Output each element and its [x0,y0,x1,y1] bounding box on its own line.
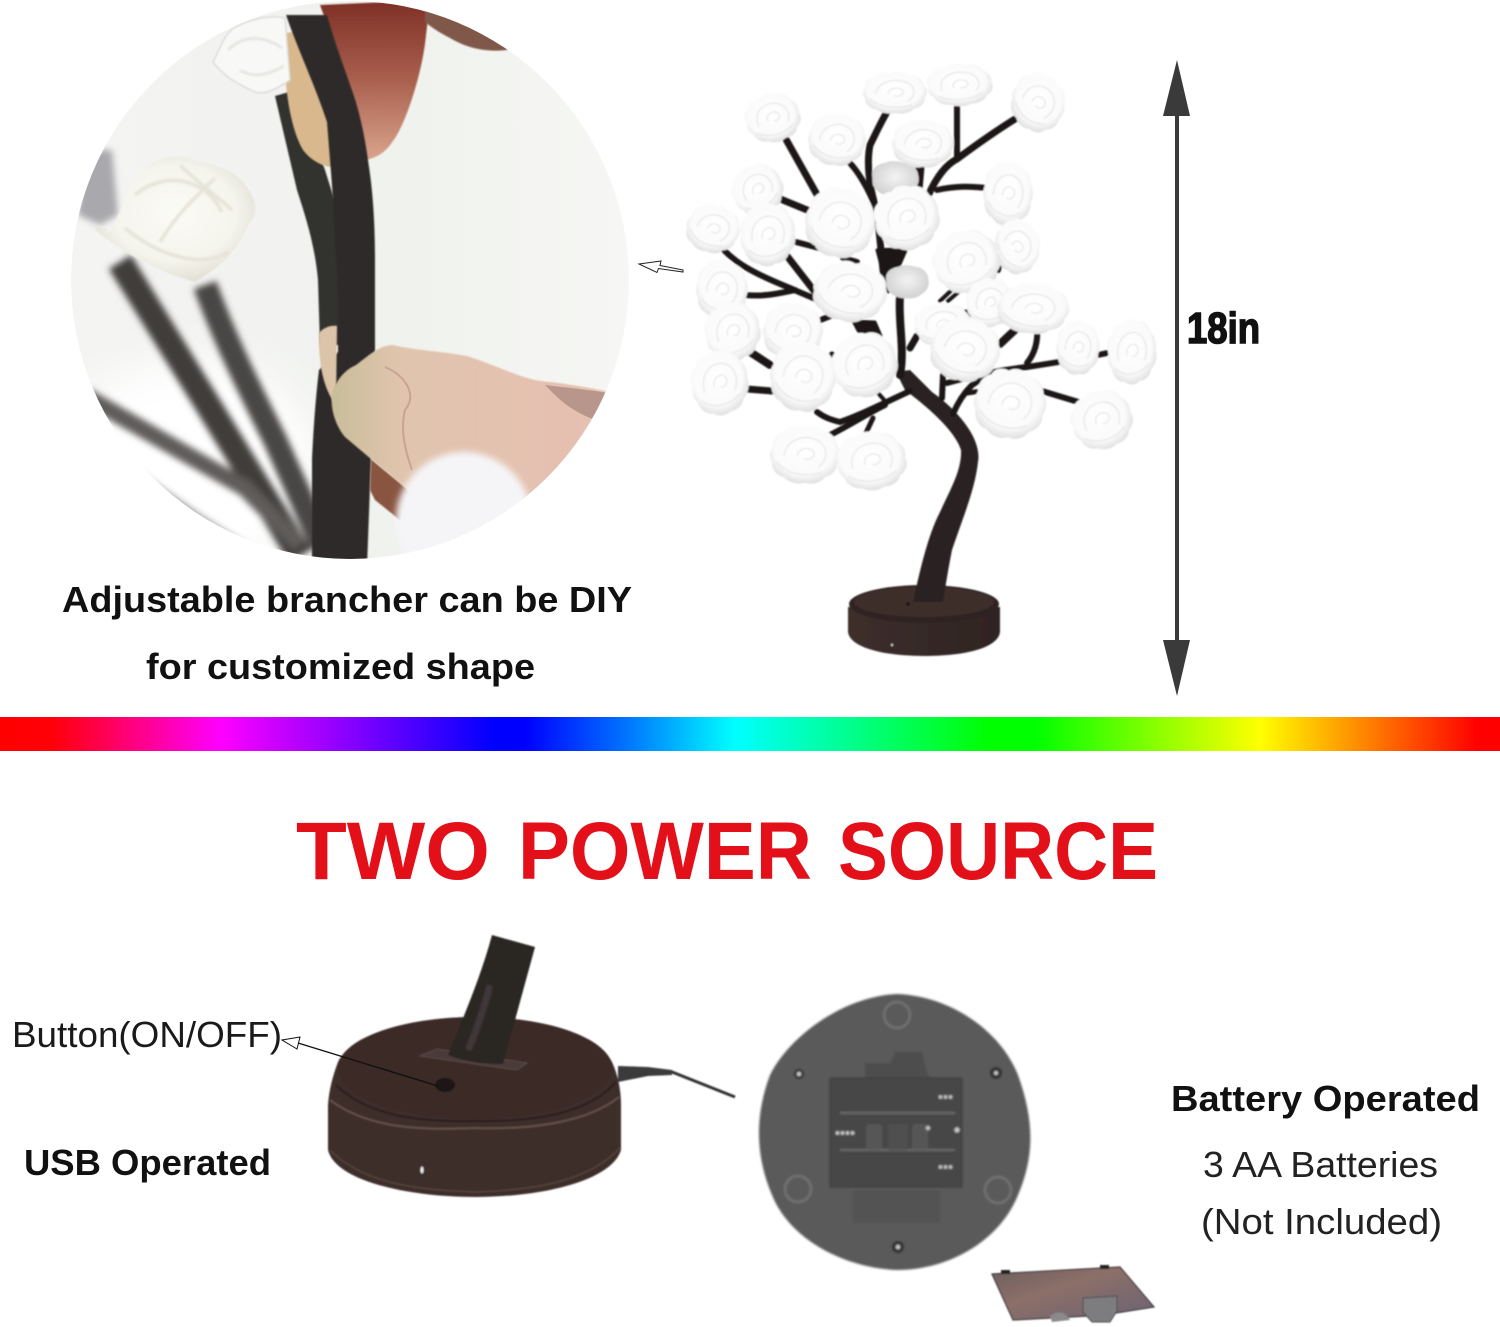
caption: adjustable branches: for customized shape [146,646,535,687]
front stem [286,15,375,567]
button [435,1078,455,1092]
rainbow divider bar [0,717,1500,751]
title [296,806,1158,897]
title: TWO [296,806,490,897]
back stem [274,92,339,346]
label: button: Button(ON/OFF) [12,1014,282,1055]
label: battery operated: 3 AA Batteries [1203,1144,1438,1185]
screws [794,1067,1002,1253]
label: battery operated: Battery Operated [1171,1078,1480,1119]
icon: small arrow pointing from tree to circle [639,261,683,272]
cable [618,1070,735,1097]
mount rings [785,1002,1011,1203]
USB base photo [328,935,735,1197]
top rose [213,17,290,93]
bottom panel [853,1190,940,1223]
hand [332,345,610,505]
blurred background branches [85,262,322,556]
stem [448,935,535,1064]
label: USB operated: USB Operated [24,1142,271,1183]
label: battery operated: (Not Included) [1201,1201,1442,1242]
battery compartment photo [759,994,1030,1270]
caption: adjustable branches: Adjustable brancher can be DIY [62,579,632,620]
base body [328,1017,621,1197]
caption: adjustable branches [62,579,632,687]
compartment notch [865,1052,932,1078]
photo: hand bending a branch in a circle [60,0,629,588]
slot plate [420,1049,527,1070]
compartment [830,1078,962,1187]
leader arrow to button [282,1037,438,1086]
title: SOURCE [838,806,1158,897]
title: POWER [518,806,812,897]
label: battery operated [1171,1078,1480,1242]
tree lamp [678,59,1160,656]
battery cover [992,1265,1154,1322]
height label: 18in [1187,304,1260,353]
tree base [848,585,1000,656]
tree trunk and branches [723,107,1112,602]
roses [678,59,1160,496]
height arrow [1163,60,1190,696]
large rose [95,157,255,282]
